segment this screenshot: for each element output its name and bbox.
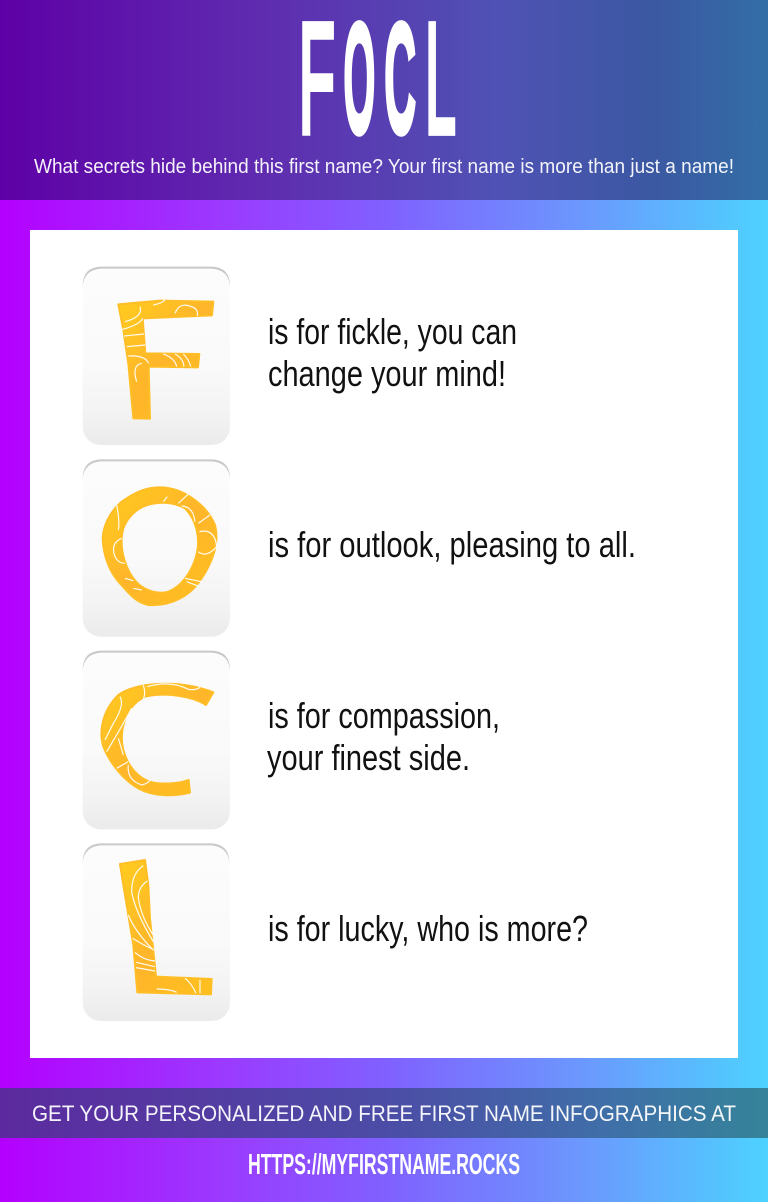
text: F line: is for fickle, you can	[268, 311, 517, 352]
card: letter L	[83, 843, 230, 1021]
white content panel	[30, 230, 738, 1058]
title	[299, 0, 456, 167]
text: C line: your finest side.	[267, 737, 470, 778]
text: F line	[268, 311, 517, 394]
text: F line: change your mind!	[268, 353, 506, 394]
card: letter C	[83, 651, 230, 829]
text: C line: is for compassion,	[268, 695, 500, 736]
text: O line: is for outlook, pleasing to all.	[268, 524, 636, 565]
text: C line	[267, 695, 500, 778]
footer call to action: GET YOUR PERSONALIZED AND FREE FIRST NAME INFOGRAPHICS AT	[32, 1101, 736, 1126]
header band	[0, 0, 768, 200]
icon: letter F	[118, 300, 213, 419]
footer url: HTTPS://MYFIRSTNAME.ROCKS	[248, 1149, 520, 1181]
icon: letter C	[101, 684, 213, 795]
footer band	[0, 1088, 768, 1138]
subtitle: What secrets hide behind this first name? Your first name is more than just a name!	[34, 156, 734, 178]
text: L line: is for lucky, who is more?	[268, 908, 588, 949]
icon: letter O	[103, 487, 217, 605]
card: letter F	[83, 267, 230, 445]
icon: letter L	[120, 860, 212, 994]
card: letter O	[83, 459, 230, 637]
